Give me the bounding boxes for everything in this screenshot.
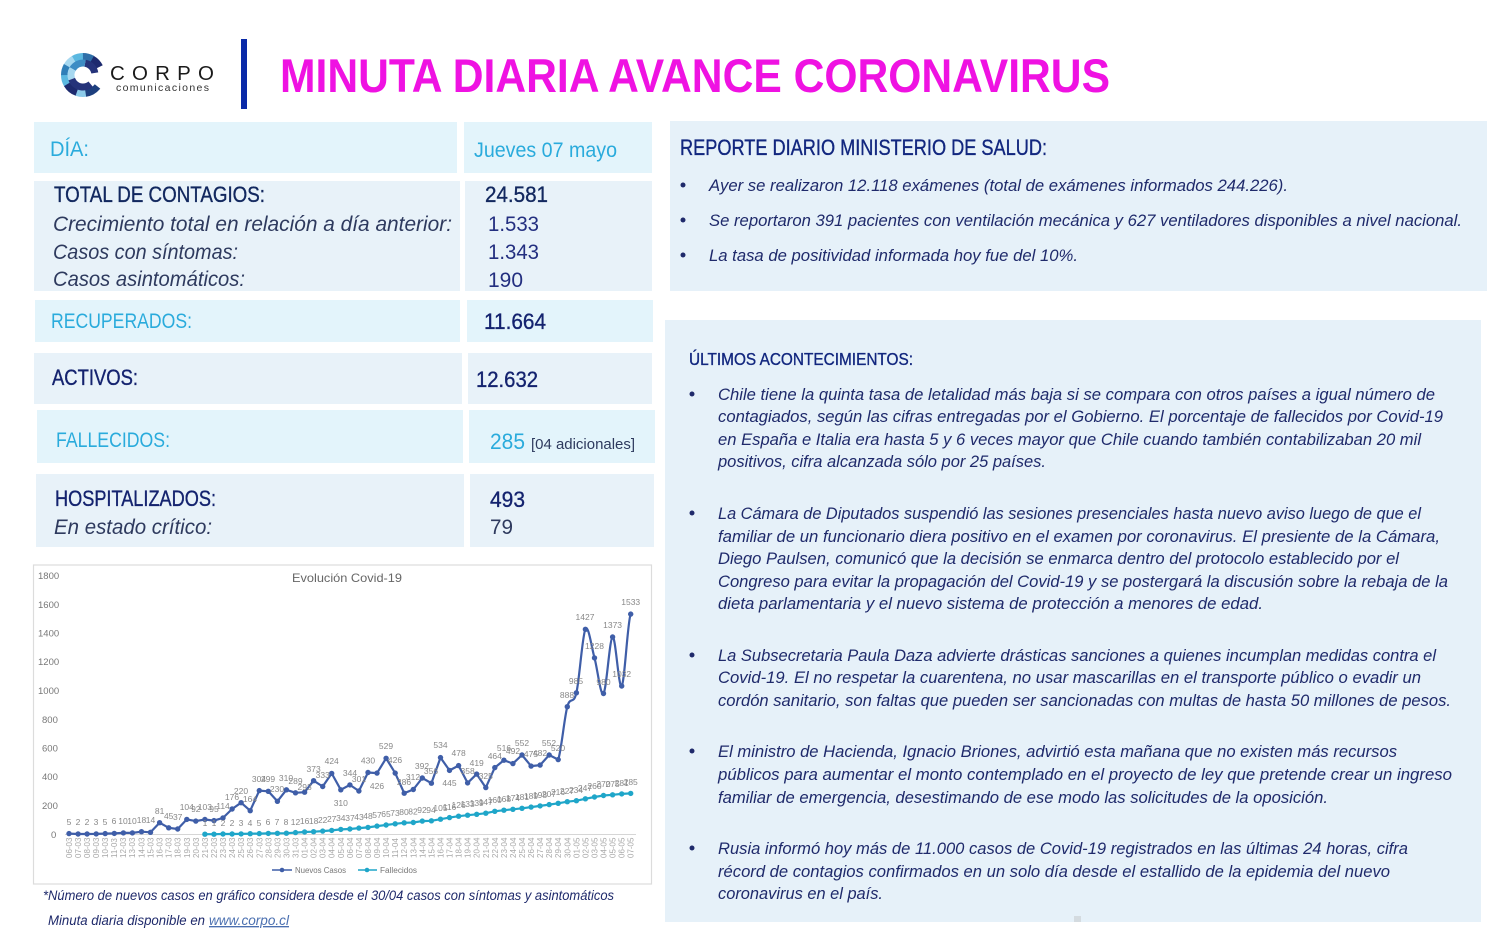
- data labels: nuevos casos: 104: [180, 802, 194, 812]
- data labels: nuevos casos: 114: [216, 801, 230, 811]
- x axis dates: 09-04: [373, 837, 382, 858]
- data labels: fallecidos: 139: [470, 798, 484, 808]
- data labels: fallecidos: 1: [203, 818, 208, 828]
- legend: [272, 866, 417, 875]
- data labels: fallecidos: 4: [248, 818, 253, 828]
- x axis dates: 23-04: [500, 837, 509, 858]
- news item: rusia: [690, 840, 1408, 903]
- data labels: fallecidos: 126: [452, 800, 466, 810]
- x axis dates: 14-03: [138, 837, 146, 858]
- data labels: fallecidos: 189: [524, 791, 538, 801]
- y axis labels: 400: [42, 772, 58, 783]
- data labels: fallecidos: 12: [291, 817, 300, 827]
- x axis dates: 22-04: [491, 837, 500, 858]
- reporte heading: REPORTE DIARIO MINISTERIO DE SALUD:: [680, 135, 1047, 160]
- y axis labels: 1600: [38, 600, 59, 611]
- x axis dates: 06-05: [618, 837, 627, 858]
- x axis dates: 29-03: [273, 837, 282, 858]
- data labels: nuevos casos: 392: [415, 761, 429, 771]
- data labels: fallecidos: 16: [300, 816, 310, 826]
- data labels: nuevos casos: 424: [325, 756, 339, 766]
- news item: cámara de diputados: La Cámara de Diputados suspendió las sesiones presenciales hasta nuevo aviso luego de que el: [718, 505, 1422, 523]
- x axis dates: 12-03: [119, 837, 128, 858]
- data labels: nuevos casos: 980: [596, 677, 611, 687]
- x axis dates: 13-04: [409, 837, 418, 858]
- x axis dates: 23-03: [219, 837, 228, 858]
- data labels: nuevos casos: 304: [252, 774, 266, 784]
- data labels: nuevos casos: 419: [470, 758, 484, 768]
- x axis dates: 06-03: [65, 837, 74, 858]
- x axis dates: 21-04: [482, 837, 491, 858]
- x axis dates: 02-04: [310, 837, 319, 858]
- data labels: fallecidos: 147: [479, 797, 493, 807]
- news item: hacienda: El ministro de Hacienda, Ignacio Briones, advirtió esta mañana que no existen más recursos: [718, 743, 1397, 761]
- y axis labels: 600: [42, 744, 58, 754]
- x axis dates: 25-03: [237, 837, 246, 858]
- data labels: nuevos casos: 482: [533, 748, 547, 758]
- data labels: nuevos casos: 373: [307, 764, 321, 774]
- x axis dates: 26-04: [527, 837, 536, 858]
- data labels: nuevos casos: 5: [103, 817, 108, 827]
- panel: activos label: [34, 353, 462, 404]
- data labels: fallecidos: 6: [266, 817, 271, 827]
- x axis dates: 26-03: [246, 837, 255, 858]
- data labels: nuevos casos: 14: [146, 815, 155, 825]
- x axis dates: 05-04: [337, 837, 346, 858]
- panel: recuperados value: [467, 300, 653, 342]
- data labels: fallecidos: 65: [381, 809, 391, 819]
- data labels: nuevos casos: 985: [569, 676, 583, 686]
- x axis dates: 18-04: [455, 837, 464, 858]
- y axis labels: 800: [42, 715, 58, 726]
- data labels: fallecidos: 57: [372, 810, 382, 820]
- panel: día value: Jueves 07 mayo: [474, 139, 617, 162]
- logo wordmark: CORPO: [110, 62, 214, 85]
- x axis dates: 08-04: [364, 837, 373, 858]
- x axis dates: 05-05: [609, 837, 618, 858]
- data labels: nuevos casos: 3: [94, 817, 99, 827]
- panel: contagios values: [465, 181, 652, 292]
- reporte bullets: La tasa de positividad informada hoy fue del 10%.: [709, 247, 1078, 265]
- data labels: fallecidos: 34: [336, 813, 346, 823]
- data labels: nuevos casos: 293: [298, 782, 312, 792]
- x axis dates: 30-03: [282, 837, 291, 858]
- panel: fallecidos value: 285: [490, 429, 525, 454]
- acontecimientos heading: ÚLTIMOS ACONTECIMIENTOS:: [689, 348, 913, 369]
- x axis dates: 09-03: [92, 837, 101, 858]
- x axis dates: 01-04: [301, 837, 310, 858]
- data labels: fallecidos: 73: [390, 808, 400, 818]
- data labels: fallecidos: 281: [615, 778, 629, 788]
- data labels: nuevos casos: 1228: [585, 641, 604, 651]
- data labels: nuevos casos: 344: [343, 768, 357, 778]
- data labels: fallecidos: 43: [354, 812, 364, 822]
- x axis dates: 08-03: [83, 837, 92, 858]
- data labels: nuevos casos: 552: [542, 738, 556, 748]
- logo wordmark: comunicaciones: [116, 82, 209, 94]
- data labels: nuevos casos: 325: [479, 771, 493, 781]
- x axis dates: 15-04: [427, 837, 436, 858]
- data labels: nuevos casos: 464: [488, 751, 502, 761]
- data labels: nuevos casos: 10: [127, 816, 137, 826]
- x axis dates: 11-03: [110, 838, 119, 858]
- panel: hospitalizados values: 493: [490, 487, 525, 512]
- x axis dates: 01-05: [572, 837, 581, 858]
- panel: últimos acontecimientos: [665, 320, 1481, 922]
- x axis dates: 20-04: [473, 837, 482, 858]
- x axis dates: 04-04: [328, 837, 337, 858]
- data labels: fallecidos: 22: [318, 815, 328, 825]
- y axis labels: 200: [42, 801, 58, 812]
- series: nuevos casos: [69, 614, 631, 834]
- data labels: nuevos casos: 2: [76, 817, 81, 827]
- data labels: fallecidos: 7: [275, 817, 280, 827]
- x axis dates: 14-04: [418, 837, 427, 858]
- data labels: nuevos casos: 426: [388, 755, 402, 765]
- data labels: fallecidos: 216: [551, 787, 565, 797]
- data labels: nuevos casos: 358: [461, 766, 475, 776]
- data labels: fallecidos: 37: [345, 813, 355, 823]
- data labels: nuevos casos: 18: [137, 815, 146, 825]
- x axis dates: 11-04: [391, 838, 400, 858]
- data labels: fallecidos: 207: [542, 789, 556, 799]
- x axis dates: 03-04: [319, 837, 328, 858]
- data labels: nuevos casos: 478: [452, 748, 466, 758]
- x axis dates: 07-04: [355, 837, 364, 858]
- x axis dates: 27-04: [536, 837, 545, 858]
- data labels: fallecidos: 2: [221, 818, 226, 828]
- news item: rusia: récord de contagios confirmados en un solo día desde el estallido de la epidemia del nuevo: [718, 863, 1390, 881]
- news item: rusia: Rusia informó hoy más de 11.000 casos de Covid-19 registrados en las últimas 24 horas, cifra: [718, 840, 1408, 858]
- x axis dates: 29-04: [554, 837, 563, 858]
- panel: contagios labels: [34, 181, 460, 291]
- x axis dates: 16-04: [436, 837, 446, 858]
- data labels: nuevos casos: 430: [361, 756, 375, 766]
- panel: contagios labels: Casos con síntomas:: [53, 241, 238, 264]
- data labels: fallecidos: 181: [515, 792, 529, 802]
- news item: letalidad: contagiados, según las cifras entregadas por el Gobierno. El porcentaje de fallecidos por Covid-19: [718, 408, 1443, 426]
- data labels: nuevos casos: 1373: [603, 620, 622, 630]
- data labels: fallecidos: 174: [506, 793, 520, 803]
- data labels: nuevos casos: 312: [406, 772, 420, 782]
- reporte bullets: Se reportaron 391 pacientes con ventilación mecánica y 627 ventiladores disponibles a nivel nacional.: [709, 212, 1462, 230]
- data labels: fallecidos: 82: [408, 806, 418, 816]
- panel: contagios values: 1.533: [488, 213, 539, 236]
- data labels: nuevos casos: 5: [67, 817, 72, 827]
- data labels: fallecidos: 18: [309, 816, 319, 826]
- news item: letalidad: positivos, cifra alcanzada sólo por 25 países.: [717, 453, 1046, 471]
- x axis dates: [65, 837, 636, 858]
- x axis dates: 21-03: [201, 837, 210, 858]
- x axis dates: 19-03: [183, 837, 192, 858]
- y axis labels: [38, 571, 59, 841]
- data labels: nuevos casos: 95: [209, 804, 219, 814]
- data labels: nuevos casos: 176: [225, 792, 239, 802]
- data labels: fallecidos: 2: [230, 818, 235, 828]
- data labels: nuevos casos: 492: [506, 746, 520, 756]
- x axis dates: 12-04: [400, 837, 409, 858]
- news item: subsecretaria: cordón sanitario, son faltas que pueden ser sancionadas con multas de hasta 50 millones de pesos.: [718, 692, 1451, 710]
- panel: hospitalizados values: 79: [490, 516, 513, 539]
- data labels: nuevos casos: 310: [279, 773, 293, 783]
- x axis dates: 24-03: [228, 837, 237, 858]
- x axis dates: 07-03: [74, 837, 83, 858]
- title: MINUTA DIARIA AVANCE CORONAVIRUS: [280, 49, 1110, 102]
- news item: cámara de diputados: Diego Paulsen, comunicó que la decisión se enmarca dentro del protocolo establecido por el: [718, 550, 1400, 568]
- data labels: nuevos casos: 1032: [612, 669, 631, 679]
- data labels: nuevos casos: 103: [198, 802, 212, 812]
- panel: contagios labels: TOTAL DE CONTAGIOS:: [54, 182, 265, 207]
- x axis dates: 27-03: [255, 837, 264, 858]
- data labels: nuevos casos: 426: [370, 781, 384, 791]
- x axis dates: 20-03: [192, 837, 201, 858]
- x axis dates: 28-04: [545, 837, 554, 858]
- source link line: [48, 913, 290, 928]
- data labels: nuevos casos: 10: [118, 816, 128, 826]
- data labels: fallecidos: 168: [497, 794, 511, 804]
- data labels: fallecidos: 48: [363, 811, 373, 821]
- news item: cámara de diputados: Congreso para evitar la propagación del Covid-19 y se postergará la discusión sobre la rebaja de la: [718, 573, 1448, 591]
- y axis labels: 1400: [38, 628, 59, 640]
- data labels: nuevos casos: 164: [243, 794, 257, 804]
- data labels: nuevos casos: [67, 597, 640, 827]
- data labels: fallecidos: 27: [327, 814, 337, 824]
- data labels: fallecidos: 247: [578, 783, 592, 793]
- reporte bullets: [680, 177, 1462, 265]
- x axis dates: 10-04: [382, 837, 391, 858]
- footnote: *Número de nuevos casos en gráfico considera desde el 30/04 casos con síntomas y asintomáticos: [43, 888, 614, 903]
- data labels: fallecidos: 94: [426, 805, 436, 815]
- data labels: nuevos casos: 333: [316, 770, 330, 780]
- news item: cámara de diputados: [690, 505, 1448, 613]
- source link line: www.corpo.cl: [209, 913, 290, 928]
- data labels: fallecidos: 8: [284, 817, 289, 827]
- panel: activos value: [468, 353, 652, 404]
- x axis dates: 18-03: [174, 837, 183, 858]
- panel: hospitalizados values: [470, 474, 654, 547]
- x axis dates: 22-03: [210, 837, 219, 858]
- data labels: nuevos casos: 552: [515, 738, 529, 748]
- x axis dates: 25-04: [518, 837, 527, 858]
- data labels: nuevos casos: 356: [424, 766, 438, 776]
- y axis labels: 1200: [38, 657, 59, 668]
- data labels: nuevos casos: 534: [433, 740, 448, 750]
- panel: contagios values: 24.581: [485, 182, 548, 207]
- news item: letalidad: Chile tiene la quinta tasa de letalidad más baja si se compara con otros países a igual número de: [718, 386, 1435, 404]
- panel: día label: DÍA:: [50, 138, 89, 161]
- panel: fallecidos value: [469, 410, 655, 463]
- x axis dates: 04-05: [600, 837, 608, 858]
- panel: recuperados value: 11.664: [484, 309, 546, 334]
- y axis labels: 0: [51, 830, 56, 841]
- x axis dates: 19-04: [464, 837, 473, 858]
- data labels: nuevos casos: 220: [234, 786, 248, 796]
- data labels: nuevos casos: 286: [397, 777, 411, 787]
- line chart: evolución covid-19: [34, 565, 652, 884]
- panel: recuperados label: [35, 300, 460, 342]
- series: fallecidos: [205, 793, 631, 834]
- data labels: nuevos casos: 230: [270, 784, 284, 794]
- data labels: fallecidos: 116: [443, 802, 457, 812]
- data labels: nuevos casos: 92: [191, 804, 201, 814]
- data labels: fallecidos: 270: [596, 779, 611, 789]
- x axis dates: 24-04: [509, 837, 518, 858]
- panel: contagios labels: Crecimiento total en relación a día anterior:: [53, 213, 452, 236]
- data labels: fallecidos: 227: [560, 786, 574, 796]
- data labels: nuevos casos: 37: [173, 812, 183, 822]
- data labels: fallecidos: 234: [569, 785, 583, 795]
- x axis dates: 31-03: [292, 837, 300, 858]
- data labels: nuevos casos: 888: [560, 690, 574, 700]
- data labels: nuevos casos: 2: [85, 817, 90, 827]
- data labels: fallecidos: 133: [461, 799, 475, 809]
- panel: activos value: 12.632: [476, 367, 538, 392]
- panel: contagios values: 190: [488, 269, 523, 292]
- data labels: nuevos casos: 529: [379, 741, 393, 751]
- chart title: Evolución Covid-19: [292, 571, 402, 585]
- header divider bar: [241, 39, 247, 109]
- data labels: nuevos casos: 299: [261, 774, 275, 784]
- data labels: fallecidos: 285: [624, 777, 638, 787]
- panel: fallecidos label: [37, 410, 463, 463]
- x axis dates: 30-04: [563, 837, 572, 858]
- x axis dates: 06-04: [346, 837, 355, 858]
- y axis labels: 1800: [38, 571, 59, 582]
- x axis dates: 07-05: [627, 837, 636, 858]
- data labels: fallecidos: 3: [239, 818, 244, 828]
- data labels: nuevos casos: 310: [334, 798, 348, 808]
- x axis dates: 28-03: [264, 837, 273, 858]
- news item: hacienda: públicos para aumentar el monto contemplado en el proyecto de ley que pretende crear un ingreso: [717, 766, 1452, 784]
- data labels: fallecidos: 80: [399, 807, 409, 817]
- panel: día label: [34, 122, 457, 173]
- data labels: nuevos casos: 6: [112, 816, 117, 826]
- legend: Nuevos Casos: [295, 866, 346, 875]
- panel: hospitalizados labels: HOSPITALIZADOS:: [55, 486, 216, 511]
- data labels: nuevos casos: 520: [551, 743, 565, 753]
- data labels: nuevos casos: 516: [497, 743, 511, 753]
- data labels: nuevos casos: 81: [155, 806, 165, 816]
- data labels: nuevos casos: 1427: [576, 612, 595, 622]
- panel: contagios labels: Casos asintomáticos:: [53, 268, 245, 291]
- panel: día value: [464, 122, 652, 173]
- panel: activos label: ACTIVOS:: [52, 365, 138, 390]
- x axis dates: 17-03: [165, 837, 174, 858]
- x axis dates: 16-03: [156, 837, 165, 858]
- x axis dates: 03-05: [590, 837, 600, 858]
- x axis dates: 02-05: [581, 837, 590, 858]
- data labels: fallecidos: 5: [257, 818, 262, 828]
- x axis dates: 17-04: [446, 837, 454, 858]
- news item: cámara de diputados: familiar de un funcionario diera positivo en el examen por coronavirus. El presiente de la Cámara,: [718, 528, 1440, 546]
- panel: fallecidos value: [04 adicionales]: [531, 437, 635, 453]
- news item: cámara de diputados: dieta parlamentaria y el nuevo sistema de protección a menores de edad.: [718, 595, 1263, 613]
- data labels: fallecidos: 198: [533, 790, 547, 800]
- data labels: nuevos casos: 289: [288, 776, 303, 786]
- data labels: fallecidos: 105: [433, 803, 448, 813]
- reporte bullets: Ayer se realizaron 12.118 exámenes (total de exámenes informados 244.226).: [708, 177, 1288, 195]
- x axis dates: 15-03: [146, 837, 156, 858]
- panel: fallecidos label: FALLECIDOS:: [56, 429, 170, 452]
- x axis dates: 10-03: [101, 837, 110, 858]
- panel: hospitalizados labels: [36, 474, 464, 547]
- panel: recuperados label: RECUPERADOS:: [51, 310, 192, 333]
- data labels: fallecidos: 1: [212, 818, 217, 828]
- data labels: nuevos casos: 45: [164, 811, 174, 821]
- news item: hacienda: familiar de emergencia, desestimando de ese modo las solicitudes de la oposición.: [718, 789, 1328, 807]
- x axis dates: 13-03: [128, 837, 137, 858]
- news item: subsecretaria: Covid-19. El no respetar la cuarentena, no usar mascarillas en el transporte público o evadir un: [718, 669, 1421, 687]
- panel: hospitalizados labels: En estado crítico:: [54, 516, 212, 539]
- news item: letalidad: [690, 386, 1443, 471]
- icon: corpo logo: [57, 49, 109, 101]
- data labels: fallecidos: 92: [417, 805, 427, 815]
- data labels: fallecidos: [203, 777, 638, 828]
- data labels: nuevos casos: 301: [352, 774, 366, 784]
- data labels: nuevos casos: 1533: [621, 597, 640, 607]
- panel: reporte diario ministerio de salud: [670, 121, 1487, 291]
- data labels: fallecidos: 260: [587, 781, 602, 791]
- news item: subsecretaria: [690, 647, 1451, 710]
- news item: hacienda: [690, 743, 1452, 807]
- y axis labels: 1000: [38, 686, 59, 697]
- data labels: nuevos casos: 445: [442, 778, 457, 788]
- legend: Fallecidos: [380, 866, 417, 875]
- news item: rusia: coronavirus en el país.: [718, 885, 883, 903]
- news item: letalidad: en España e Italia era hasta 5 y 6 veces mayor que Chile cuando también contabilizaban 20 mil: [718, 431, 1422, 449]
- data labels: fallecidos: 160: [488, 795, 502, 805]
- panel: contagios values: 1.343: [488, 241, 539, 264]
- data labels: nuevos casos: 475: [524, 749, 538, 759]
- data labels: fallecidos: 275: [606, 779, 620, 789]
- source link line: Minuta diaria disponible en: [48, 913, 205, 928]
- news item: subsecretaria: La Subsecretaria Paula Daza advierte drásticas sanciones a quienes incumplan medidas contra el: [718, 647, 1437, 665]
